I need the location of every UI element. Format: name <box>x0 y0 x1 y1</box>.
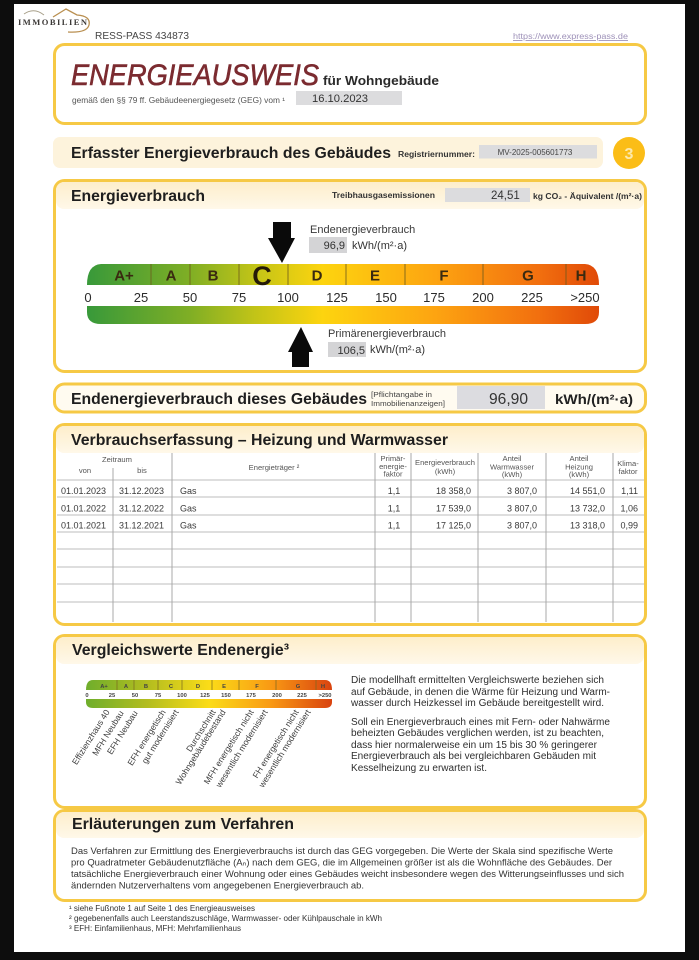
table row 2022: 31.12.2022 <box>119 504 164 514</box>
rotated building type labels: EFH energetisch <box>125 708 168 767</box>
energy class bar <box>87 261 599 291</box>
heading: Erläuterungen zum Verfahren <box>72 816 294 833</box>
explanation text: Kesselheizung zu erwarten ist. <box>351 763 487 774</box>
body text: pro Quadratmeter Gebäudenutzfläche (Aₙ) nach dem GEG, die im Allgemeinen größer ist als die Wohnfläche des Gebäudes. Der <box>71 858 612 868</box>
table row 2021: 0,99 <box>620 520 638 530</box>
arrow: primary energy marker <box>288 327 313 367</box>
mini scale labels: 50 <box>132 693 138 699</box>
explanation text: Die modellhaft ermittelten Vergleichswerte beziehen sich <box>351 675 604 686</box>
scale labels: 25 <box>134 290 148 305</box>
mini scale labels: 0 <box>85 693 89 699</box>
page number badge <box>613 137 645 169</box>
table header: bis <box>137 466 147 475</box>
panel: consumption recording <box>54 424 646 624</box>
mini scale labels: 100 <box>177 693 187 699</box>
table row 2021: 3 807,0 <box>507 520 537 530</box>
scale labels <box>84 290 600 305</box>
primary energy label: 106,5 <box>337 345 365 357</box>
energy class bar: A <box>166 268 177 284</box>
rotated building type labels: MFH Neubau <box>90 709 126 757</box>
footnotes: ¹ siehe Fußnote 1 auf Seite 1 des Energieausweises <box>69 904 255 913</box>
table header: Primär- <box>381 454 406 463</box>
table row 2023: Gas <box>180 486 197 496</box>
rotated building type labels: MFH energetisch nicht <box>202 707 256 786</box>
date field <box>296 91 402 105</box>
primary energy label <box>328 328 446 357</box>
rotated building type labels: Durchschnitt <box>184 707 218 754</box>
explanation text: dass hier normalerweise ein um 15 bis 30 % geringerer <box>351 740 598 751</box>
table header: Zeitraum <box>102 455 132 464</box>
table row 2023: 3 807,0 <box>507 486 537 496</box>
table row 2022: Gas <box>180 504 197 514</box>
table header: Anteil <box>502 454 522 463</box>
explanation text: wasser durch Heizkessel im Gebäude bereitgestellt wird. <box>350 698 604 709</box>
scale labels: 200 <box>472 290 494 305</box>
table row 2022: 1,06 <box>620 504 638 514</box>
rotated building type labels: gut modernisiert <box>140 707 181 765</box>
energy class bar: B <box>208 268 219 284</box>
unit: kWh/(m²·a) <box>555 391 633 407</box>
mini energy class bar: G <box>296 684 301 690</box>
table row 2021: 17 125,0 <box>436 520 471 530</box>
subheading: für Wohngebäude <box>323 73 439 88</box>
registration label: Registriernummer: <box>398 150 475 159</box>
legal basis: gemäß den §§ 79 ff. Gebäudeenergiegesetz (GEG) vom ¹ <box>72 95 285 105</box>
table row 2021 <box>61 520 638 530</box>
body text: ändernden Nutzerverhaltens vom angegebenen Energieverbrauch ab. <box>71 880 364 892</box>
table row 2022: 3 807,0 <box>507 504 537 514</box>
explanation text: Soll ein Energieverbrauch eines mit Fern- oder Nahwärme <box>351 717 610 728</box>
rotated building type labels: wesentlich modernisiert <box>256 707 313 790</box>
primary energy label: kWh/(m²·a) <box>370 344 425 356</box>
final energy label: 96,9 <box>324 240 345 252</box>
date field: 16.10.2023 <box>312 93 368 105</box>
energy class bar: F <box>439 268 449 284</box>
table header: Warmwasser <box>490 462 534 472</box>
table row 2023: 1,1 <box>388 486 400 496</box>
mini energy class bar: B <box>144 684 148 690</box>
arrow: final energy marker <box>268 222 295 263</box>
rotated building type labels <box>70 707 313 790</box>
table header: Heizung <box>565 462 593 472</box>
table header: energie- <box>379 462 407 471</box>
final energy label: Endenergieverbrauch <box>310 224 415 236</box>
registration number <box>479 145 597 158</box>
table row 2023: 31.12.2023 <box>119 486 164 496</box>
scale labels: 125 <box>326 290 348 305</box>
table header: Energieverbrauch <box>415 458 475 467</box>
heading: Erfasster Energieverbrauch des Gebäudes <box>71 145 391 162</box>
table row 2021: Gas <box>180 520 197 530</box>
table header <box>79 454 639 479</box>
primary energy label: Primärenergieverbrauch <box>328 328 446 340</box>
table row 2023 <box>61 486 638 496</box>
heading: Endenergieverbrauch dieses Gebäudes <box>71 391 367 408</box>
table grid <box>57 453 644 622</box>
emissions unit: kg CO₂ - Äquivalent /(m²·a) <box>533 192 642 201</box>
table row 2021: 31.12.2021 <box>119 520 164 530</box>
scale labels: 75 <box>232 290 246 305</box>
mini energy class bar: C <box>169 684 174 690</box>
energy class bar: D <box>312 268 323 284</box>
final energy label: kWh/(m²·a) <box>352 240 407 252</box>
scale labels: 0 <box>84 290 92 305</box>
table row 2023: 14 551,0 <box>570 486 605 496</box>
table row 2023: 18 358,0 <box>436 486 471 496</box>
table header: (kWh) <box>435 467 456 476</box>
primary energy bar <box>87 306 599 324</box>
mini scale labels: 175 <box>246 693 257 699</box>
mini gradient bar <box>86 699 332 708</box>
table header: faktor <box>618 467 638 476</box>
mini energy class bar: A+ <box>100 684 108 690</box>
body text: Das Verfahren zur Ermittlung des Energieverbrauchs ist durch das GEG vorgegeben. Die Werte der Skala sind spezifische Werte <box>71 846 613 857</box>
energy class bar: A+ <box>114 268 134 284</box>
energy class bar: H <box>576 268 586 284</box>
table row 2022: 13 732,0 <box>570 504 605 514</box>
final energy label <box>309 224 415 253</box>
scale labels: 150 <box>375 290 397 305</box>
mini energy class bar <box>86 680 332 690</box>
value field <box>457 386 545 409</box>
mini scale labels <box>85 693 332 699</box>
panel: energy consumption <box>54 180 646 372</box>
emissions value <box>445 188 530 202</box>
mini scale labels: 150 <box>221 693 231 699</box>
energy class bar: C <box>252 261 272 291</box>
scale labels: 175 <box>423 290 445 305</box>
mini scale labels: 225 <box>297 693 308 699</box>
explanation text: Energieverbrauch als bei vergleichbaren Gebäuden mit <box>351 751 596 762</box>
emissions label: Treibhausgasemissionen <box>332 191 435 200</box>
heading: Vergleichswerte Endenergie³ <box>72 642 289 659</box>
body text: tatsächliche Energieverbrauch einer Wohnung oder eines Gebäudes weicht insbesondere wegen des Witterungseinflusses und sich <box>71 869 624 880</box>
mini energy class bar: D <box>196 684 200 690</box>
note: [Pflichtangabe in <box>371 392 432 399</box>
panel: final energy of this building: Immobilienanzeigen] <box>371 401 445 408</box>
rotated building type labels: EFH Neubau <box>105 709 140 756</box>
table row 2021: 13 318,0 <box>570 520 605 530</box>
panel: title <box>54 44 646 124</box>
scale labels: 50 <box>183 290 197 305</box>
panel: recorded consumption header <box>53 137 603 168</box>
document id: RESS-PASS 434873 <box>95 30 189 42</box>
heading: Verbrauchserfassung – Heizung und Warmwasser <box>71 432 448 449</box>
energy class bar: G <box>522 268 534 284</box>
panel: comparison values <box>54 636 646 808</box>
logo: Immobilien: IMMOBILIEN <box>18 17 88 27</box>
rotated building type labels: Wohngebäudebestand <box>173 708 228 786</box>
table header: (kWh) <box>569 470 590 479</box>
heading: Energieausweis: ENERGIEAUSWEIS <box>71 59 319 92</box>
mini energy class bar: A <box>124 684 129 690</box>
table header: von <box>79 466 91 475</box>
mini energy class bar: F <box>255 684 259 690</box>
rotated building type labels: FH energetisch nicht <box>250 707 301 780</box>
scale labels: >250 <box>570 290 600 305</box>
table header: faktor <box>384 470 403 478</box>
heading: Energieverbrauch <box>71 188 205 205</box>
table row 2021: 01.01.2021 <box>61 520 106 530</box>
table header: Anteil <box>570 454 589 463</box>
table row 2022: 17 539,0 <box>436 504 471 514</box>
mini scale labels: 125 <box>200 693 211 699</box>
mini scale labels: 25 <box>109 693 116 699</box>
logo: Immobilien <box>18 9 89 32</box>
body text <box>71 846 624 892</box>
footnotes <box>69 904 382 933</box>
table header: Klima- <box>617 459 639 468</box>
panel: procedure notes <box>54 810 646 900</box>
footnotes: ² gegebenenfalls auch Leerstandszuschläge, Warmwasser- oder Kühlpauschale in kWh <box>69 914 382 923</box>
table header: Energieträger ² <box>249 463 300 472</box>
panel: final energy of this building <box>54 384 646 412</box>
explanation text <box>350 675 610 774</box>
table row 2022 <box>61 504 638 514</box>
mini scale labels: 200 <box>272 693 282 699</box>
value field: 96,90 <box>489 391 528 408</box>
energy class bar: E <box>370 268 380 284</box>
mini scale labels: 75 <box>155 693 162 699</box>
table row 2023: 1,11 <box>621 486 638 496</box>
table header: (kWh) <box>502 470 523 479</box>
rotated building type labels: Effizienzhaus 40 <box>70 708 112 766</box>
explanation text: beheizten Gebäudes verglichen werden, ist zu beachten, <box>351 728 604 739</box>
table row 2022: 01.01.2022 <box>61 504 106 514</box>
table row 2021: 1,1 <box>388 520 400 530</box>
rotated building type labels: wesentlich modernisiert <box>213 707 270 790</box>
table row 2022: 1,1 <box>388 504 400 514</box>
source url: https://www.express-pass.de <box>513 31 628 41</box>
table row 2023: 01.01.2023 <box>61 486 106 496</box>
mini energy class bar: E <box>222 684 226 690</box>
mini scale labels: >250 <box>318 693 332 699</box>
page number badge: 3 <box>625 146 634 163</box>
footnotes: ³ EFH: Einfamilienhaus, MFH: Mehrfamilienhaus <box>69 924 241 933</box>
mini energy class bar: H <box>321 684 325 690</box>
explanation text: auf Gebäude, in denen die Wärme für Heizung und Warm- <box>351 687 610 698</box>
scale labels: 225 <box>521 290 543 305</box>
scale labels: 100 <box>277 290 299 305</box>
registration number: MV-2025-005601773 <box>498 148 573 157</box>
emissions value: 24,51 <box>491 190 520 202</box>
